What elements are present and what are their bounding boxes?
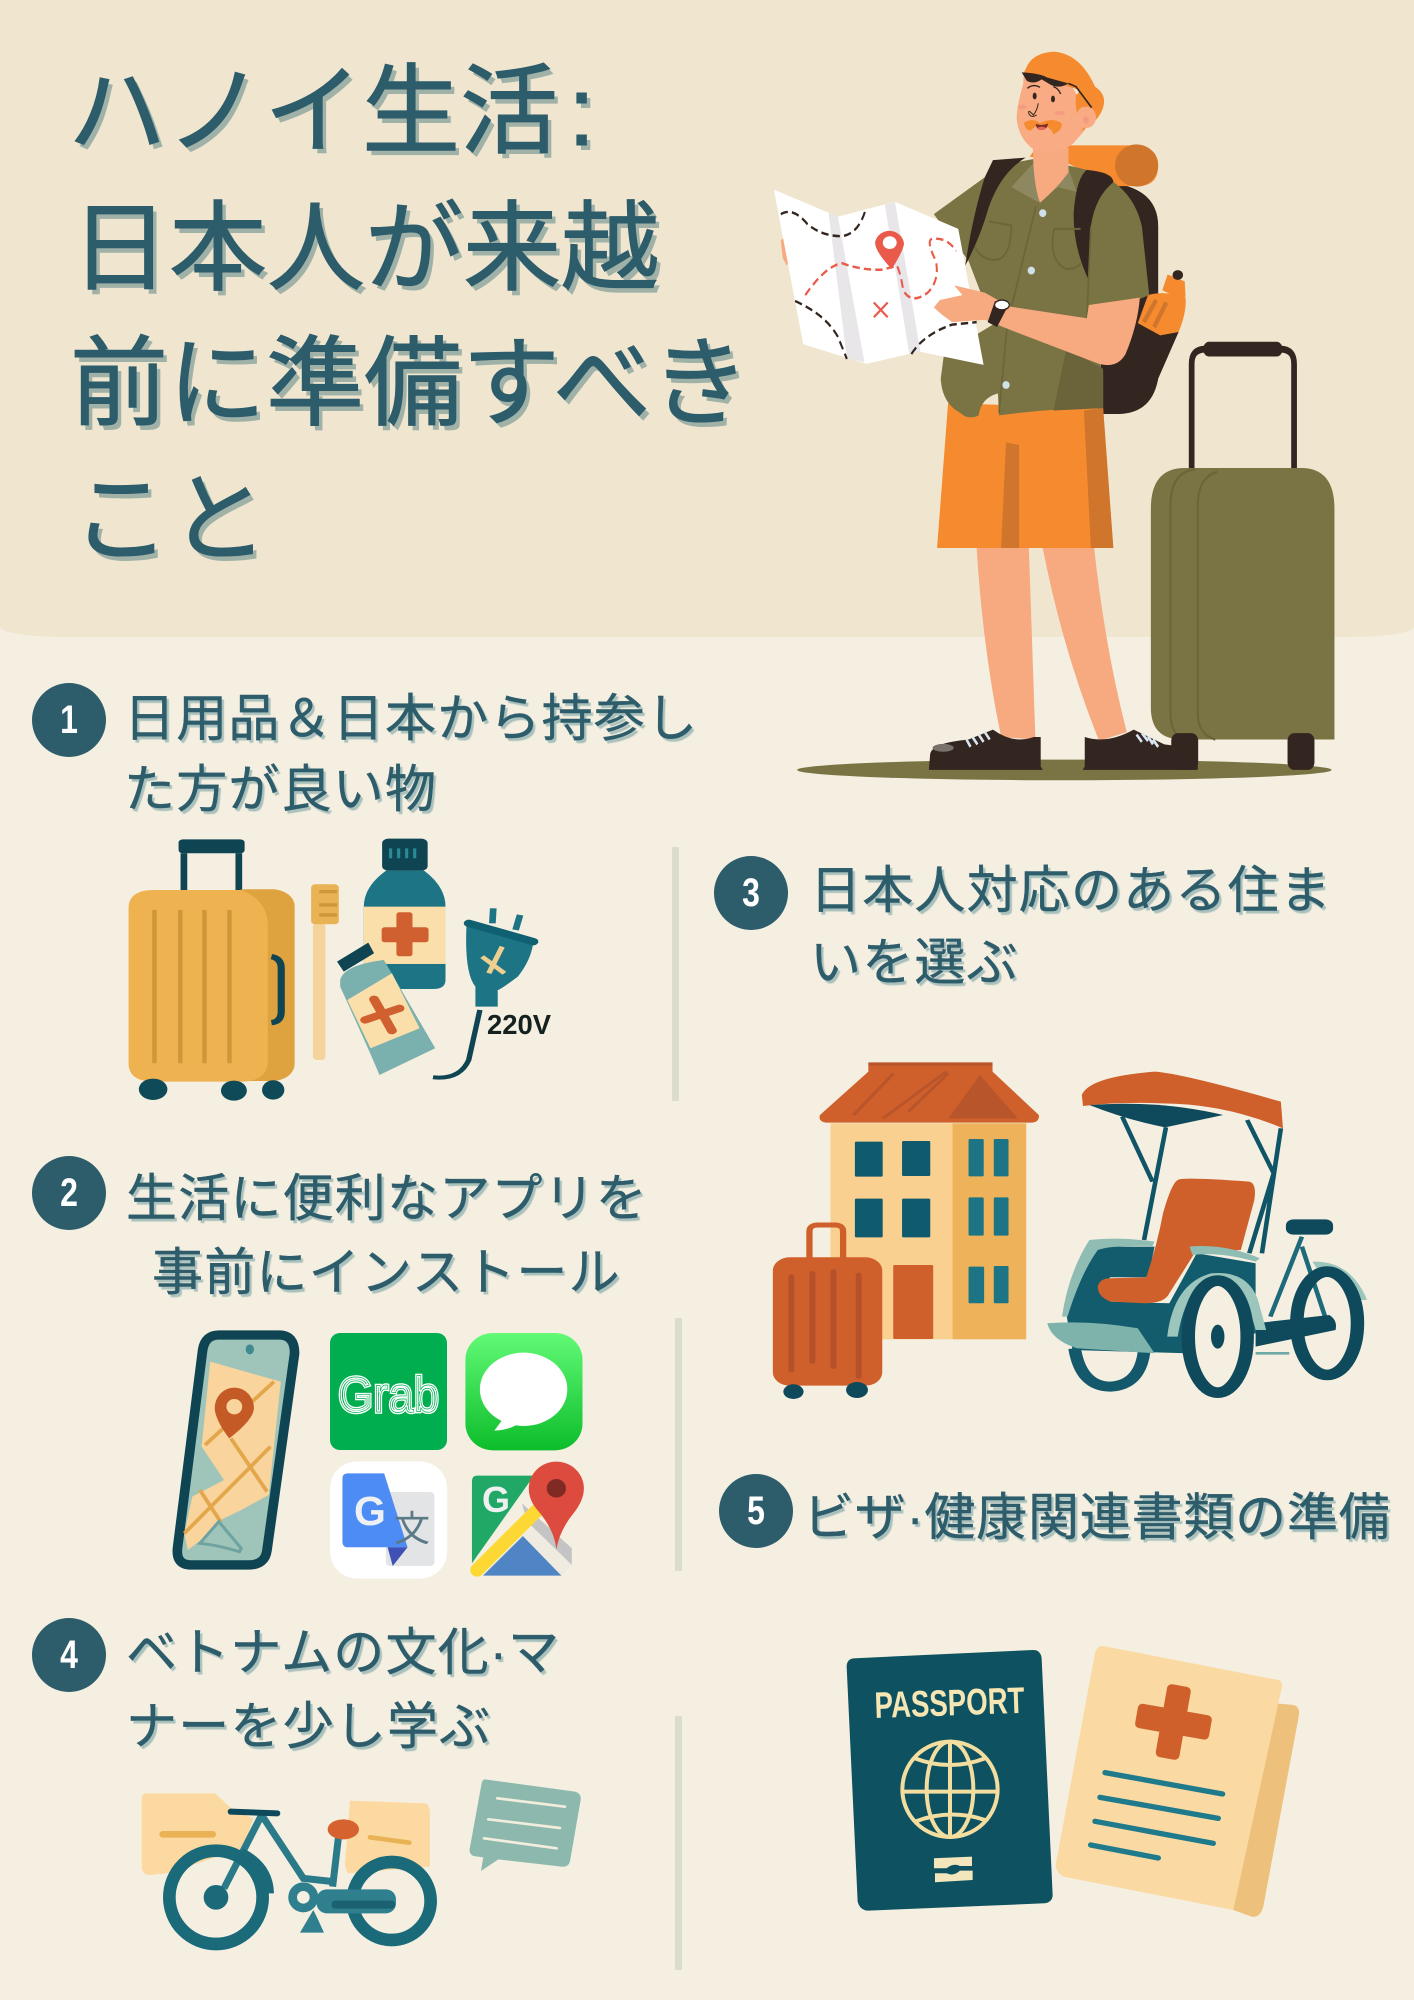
heading 3 text — [810, 862, 1332, 991]
heading 2 text: 事前にインストール — [152, 1244, 621, 1301]
app icon: Google Translate — [330, 1461, 447, 1579]
app icon: Google Translate: 文 — [394, 1508, 430, 1549]
badge 5: 5 — [747, 1489, 765, 1533]
heading 1 text — [124, 690, 698, 818]
icon: speech bubble — [470, 1779, 581, 1871]
section 3 heading — [714, 856, 1332, 991]
illustration: luggage, medicine and plug — [129, 839, 533, 1101]
badge 3 — [714, 856, 788, 930]
app icon: Grab: Grab — [338, 1367, 439, 1423]
heading 3 text: 日本人対応のある住ま — [810, 862, 1332, 919]
divider 3 — [675, 1716, 682, 1970]
illustration: passport: PASSPORT — [874, 1680, 1025, 1726]
badge 5 — [719, 1474, 793, 1548]
illustration: passport — [847, 1650, 1053, 1911]
title: ハノイ生活: — [68, 56, 595, 166]
badge 2: 2 — [60, 1171, 78, 1215]
illustration: cyclo rickshaw — [1047, 1072, 1367, 1393]
title — [68, 56, 749, 574]
title: こと — [72, 464, 268, 574]
badge 2 — [32, 1156, 106, 1230]
heading 1 text: た方が良い物 — [124, 761, 437, 818]
title: 前に準備すべき — [70, 328, 749, 438]
app icon: Google Maps: G — [482, 1479, 510, 1520]
header band — [0, 0, 1414, 637]
section 1 heading — [32, 683, 698, 818]
heading 3 text: いを選ぶ — [810, 934, 1019, 991]
illustration: traveller with map and suitcase — [774, 52, 1334, 780]
heading 2 text: 生活に便利なアプリを — [126, 1170, 648, 1227]
section 2 heading — [32, 1156, 648, 1301]
divider 2 — [675, 1318, 682, 1571]
heading 4 text — [126, 1624, 560, 1755]
heading 1 text: 日用品＆日本から持参し — [124, 690, 698, 747]
app icon: Grab — [330, 1333, 447, 1450]
heading 5 text: ビザ·健康関連書類の準備 — [803, 1489, 1391, 1546]
divider 1 — [672, 847, 679, 1101]
app icon: Messages — [465, 1333, 583, 1450]
illustration: medical document — [1056, 1646, 1299, 1917]
heading 4 text: ベトナムの文化·マ — [126, 1624, 560, 1681]
badge 4 — [32, 1618, 106, 1692]
illustration: building and suitcase — [773, 1063, 1039, 1399]
badge 1 — [32, 683, 106, 757]
badge 3: 3 — [742, 871, 760, 915]
illustration: bicycle with parcels — [142, 1793, 431, 1944]
badge 4: 4 — [60, 1633, 78, 1677]
app icon: Google Translate: G — [354, 1488, 386, 1534]
heading 4 text: ナーを少し学ぶ — [126, 1698, 491, 1755]
heading 2 text — [126, 1170, 648, 1301]
section 5 heading — [719, 1474, 1391, 1548]
illustration: phone with map — [177, 1335, 295, 1565]
section 4 heading — [32, 1618, 560, 1755]
label: 220V: 220V — [487, 1009, 551, 1040]
badge 1: 1 — [60, 698, 78, 742]
app icon: Grab: Grab — [338, 1367, 439, 1423]
app icon: Google Maps — [472, 1462, 584, 1576]
title: 日本人が来越 — [71, 193, 659, 303]
